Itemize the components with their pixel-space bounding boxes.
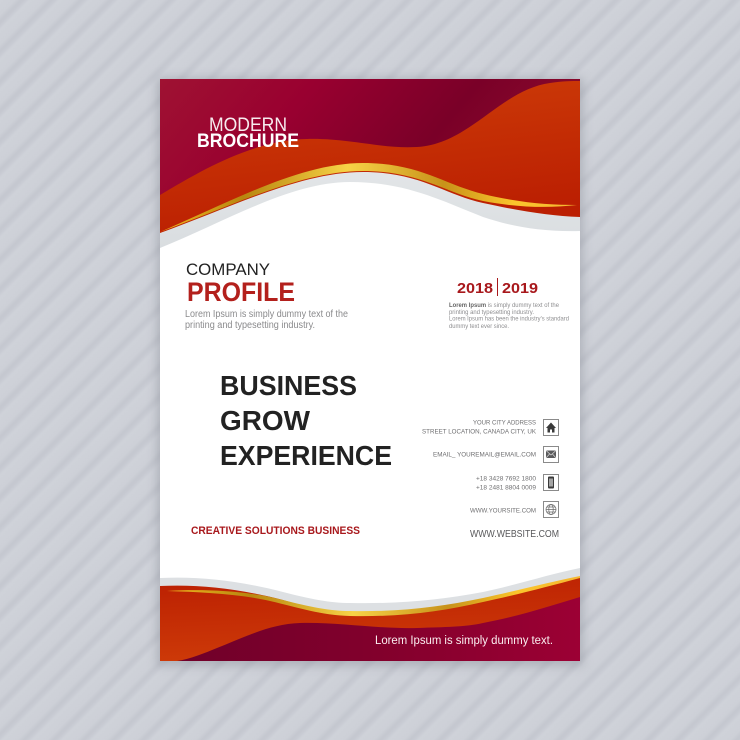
website address: WWW.WEBSITE.COM (470, 529, 559, 540)
years: 2018 | 2019: 2019 (502, 280, 538, 297)
icon: home (544, 420, 558, 436)
contact: address (422, 420, 537, 436)
years description (449, 303, 569, 330)
contact: address: STREET LOCATION, CANADA CITY, UK (422, 428, 537, 436)
heading: company profile: PROFILE (187, 277, 295, 307)
brochure page shadow (157, 78, 583, 666)
contact: address: YOUR CITY ADDRESS (473, 420, 537, 426)
contact: website: WWW.YOURSITE.COM (470, 507, 536, 514)
silver wave (160, 568, 580, 661)
years: 2018 | 2019 (457, 278, 538, 297)
main headline: GROW (220, 405, 311, 436)
top wave band (160, 79, 580, 248)
heading: company profile: COMPANY (186, 260, 270, 279)
orange wave (160, 577, 580, 661)
gold wave (167, 576, 580, 616)
crimson top field (160, 79, 580, 205)
years: 2018 | 2019: 2018 (457, 280, 493, 297)
main headline (220, 370, 392, 471)
brochure page (160, 79, 580, 661)
years description: dummy text ever since. (449, 324, 509, 330)
main headline: EXPERIENCE (220, 440, 392, 471)
contact: phone numbers: +18 2481 8804 0009 (476, 484, 536, 491)
footer text: Lorem Ipsum is simply dummy text. (375, 635, 553, 647)
heading: company profile (186, 260, 295, 307)
crimson wave (177, 597, 580, 661)
company profile description: Lorem Ipsum is simply dummy text of the (185, 309, 348, 320)
icon: mail (544, 446, 558, 462)
tagline: CREATIVE SOLUTIONS BUSINESS (191, 525, 360, 537)
years description: Lorem Ipsum has been the industry's standard (449, 316, 569, 322)
orange wave (160, 81, 580, 233)
silver wave (160, 79, 580, 248)
gold wave (160, 163, 577, 232)
title: modern brochure (197, 115, 299, 152)
contact: email: EMAIL_ YOUREMAIL@EMAIL.COM (433, 451, 536, 458)
years description: printing and typesetting industry. (449, 310, 534, 316)
contact: phone numbers (476, 475, 536, 491)
icon: phone (544, 474, 558, 490)
title: modern brochure: BROCHURE (197, 130, 299, 152)
company profile description: printing and typesetting industry. (185, 320, 315, 331)
icon: globe (544, 502, 558, 518)
title: modern brochure: MODERN (209, 115, 287, 136)
bottom wave band (160, 568, 580, 661)
years description: Lorem Ipsum is simply dummy text of the (449, 303, 560, 309)
contact: phone numbers: +18 3428 7692 1800 (476, 475, 536, 482)
company profile description (185, 309, 348, 331)
main headline: BUSINESS (220, 370, 357, 401)
